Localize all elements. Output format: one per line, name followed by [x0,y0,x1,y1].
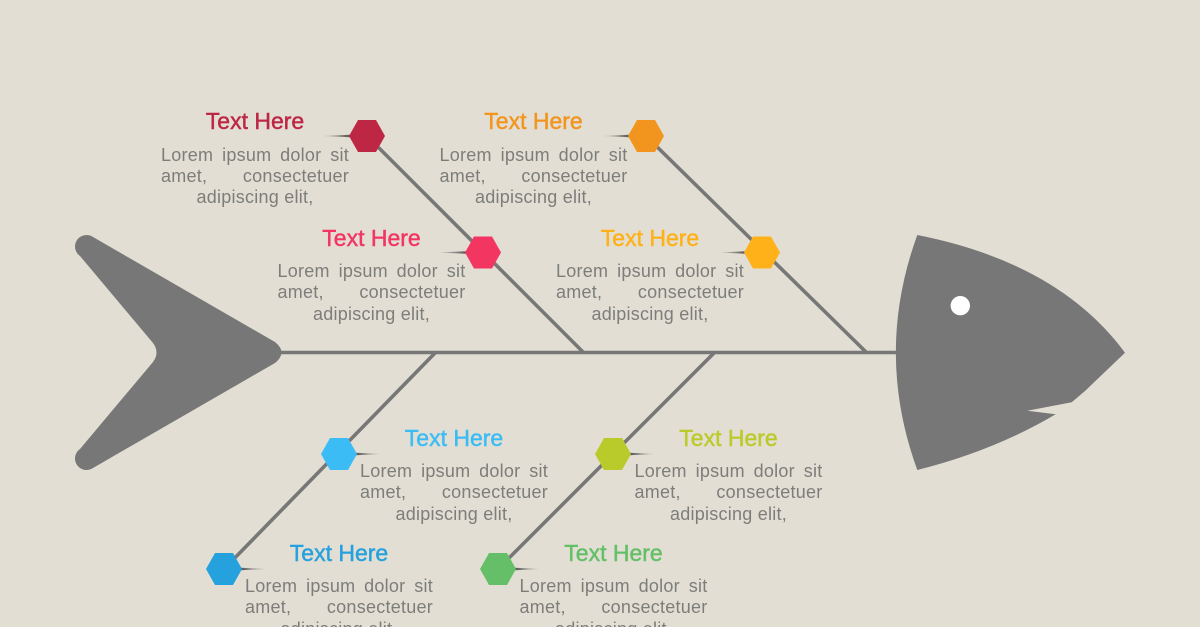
text block: sky blue [360,424,548,524]
node: pink [438,236,501,268]
eye [951,296,970,315]
heading: Text Here [322,224,421,250]
body text [440,144,628,207]
body text: amet, consectetuer [161,166,349,186]
body text [556,261,744,324]
body text: amet, consectetuer [278,282,466,302]
body text [278,261,466,324]
heading: Text Here [484,108,583,134]
body text: Lorem ipsum dolor sit [634,461,822,481]
text block: lime [634,424,822,524]
body text: Lorem ipsum dolor sit [278,261,466,281]
node: blue [206,553,266,585]
text block: orange [440,108,628,207]
text block: pink [278,224,466,324]
heading: Text Here [290,540,388,566]
node: maroon [322,120,385,152]
text block: green [520,540,708,627]
node: green [480,553,540,585]
body text: Lorem ipsum dolor sit [161,144,349,164]
spine [278,351,898,354]
tail [75,235,282,470]
bones [224,136,866,569]
text block: amber [556,224,744,324]
body text: Lorem ipsum dolor sit [360,461,548,481]
text block: maroon [161,108,349,207]
body text: adipiscing elit, [475,187,592,207]
node: lime [595,438,655,470]
body text: Lorem ipsum dolor sit [556,261,744,281]
heading: Text Here [405,424,503,450]
body text: Lorem ipsum dolor sit [520,576,708,596]
body text: amet, consectetuer [360,482,548,502]
body text: Lorem ipsum dolor sit [440,144,628,164]
body text: adipiscing elit, [591,304,709,324]
body text [245,576,433,627]
body text: amet, consectetuer [245,597,433,617]
heading: Text Here [601,224,699,250]
node: sky blue [321,438,381,470]
text block: blue [245,540,433,627]
heading: Text Here [564,540,663,566]
body text [161,144,349,207]
body text: adipiscing elit, [196,187,314,207]
body text: adipiscing elit, [670,504,787,524]
body text: adipiscing elit, [395,504,513,524]
body text: amet, consectetuer [520,597,708,617]
heading: Text Here [206,108,304,134]
body text: amet, consectetuer [634,482,822,502]
body text [360,461,548,524]
node: amber [720,236,780,268]
body text: Lorem ipsum dolor sit [245,576,433,596]
heading: Text Here [679,424,778,450]
node: orange [603,120,664,152]
body text: adipiscing elit, [313,304,430,324]
body text [520,576,708,627]
head [896,235,1125,470]
body text [634,461,822,524]
body text: amet, consectetuer [556,282,744,302]
body text: amet, consectetuer [440,166,628,186]
